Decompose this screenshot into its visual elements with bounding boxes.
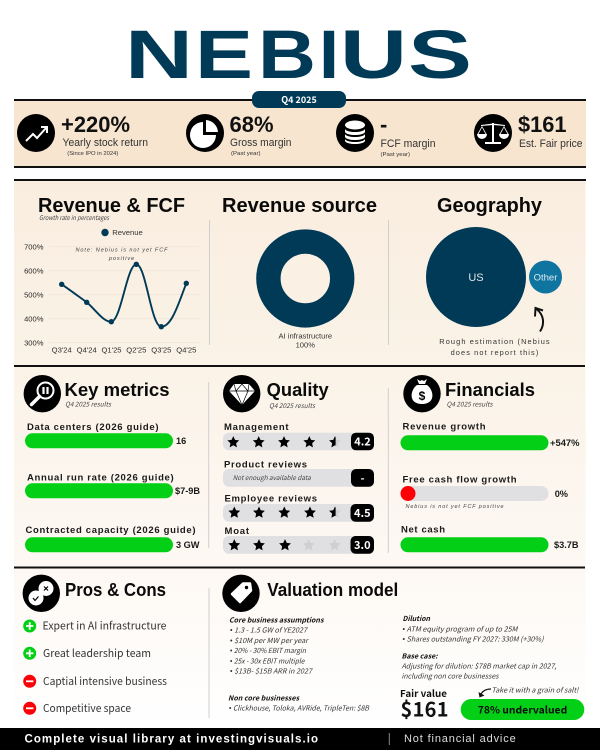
rating: employee reviews xyxy=(223,494,374,522)
icon: pie chart xyxy=(186,114,224,152)
line chart: revenue growth: 300% xyxy=(24,338,44,348)
stat: gross margin: Gross margin xyxy=(230,137,292,149)
fair value: Fair value xyxy=(400,686,447,700)
badge: Q4 2025: Q4 2025 xyxy=(281,93,317,106)
text: non core businesses xyxy=(228,693,370,714)
footer: Not financial advice xyxy=(404,733,516,745)
rating: management: 4.2 xyxy=(354,434,371,450)
rating: employee reviews: Employee reviews xyxy=(224,494,317,505)
stat: FCF margin xyxy=(380,112,436,158)
estimation note: Rough estimation (Nebius xyxy=(439,337,551,346)
text: dilution: • Shares outstanding FY 2027: 330M (+30%) xyxy=(402,635,544,645)
metric: free cash flow growth: Nebius is not yet FCF positive xyxy=(406,504,504,510)
line chart: revenue growth: 700% xyxy=(24,242,44,252)
panel: Valuation model xyxy=(222,575,584,723)
metric: data centers: 16 xyxy=(176,436,186,446)
icon: money bag: $ xyxy=(419,389,426,403)
metric: data centers xyxy=(25,422,186,448)
fair value: $161 xyxy=(400,694,448,723)
bubble: Other xyxy=(529,260,562,294)
stat: stock return: +220% xyxy=(61,112,130,137)
heading: Revenue & FCF xyxy=(38,195,185,217)
rating: management xyxy=(223,422,374,450)
rating: moat: Moat xyxy=(224,526,250,537)
panel: Revenue source xyxy=(222,195,377,350)
icon: pros and cons xyxy=(23,575,60,612)
text: core business assumptions: • 25x - 30x EBIT multiple xyxy=(230,656,306,666)
icon: balance scales xyxy=(474,114,512,152)
metric: contracted capacity: 3 GW xyxy=(176,540,200,550)
line chart: revenue growth: 500% xyxy=(24,290,44,300)
chart note xyxy=(75,248,169,262)
stat: stock return: (Since IPO in 2024) xyxy=(67,151,118,157)
rating: product reviews: Not enough available data xyxy=(233,472,311,482)
logo: Nebius wordmark: I xyxy=(319,16,339,93)
footer xyxy=(0,728,600,750)
line chart: revenue growth: Q4'25 xyxy=(176,346,196,354)
icon: stock trend xyxy=(17,114,55,152)
panel: Key metrics xyxy=(24,375,200,552)
pro item: Great leadership team xyxy=(43,646,151,661)
legend: Revenue xyxy=(112,228,143,237)
text: dilution: Dilution xyxy=(402,614,431,624)
bubble: US xyxy=(426,227,526,327)
metric: free cash flow growth: 0% xyxy=(555,489,568,499)
text: non core businesses: • Clickhouse, Toloka, AVRide, TripleTen: $8B xyxy=(229,704,370,714)
line chart: revenue growth: Q3'24 xyxy=(52,346,72,354)
donut label: 100% xyxy=(296,340,315,350)
con item: Captial intensive business xyxy=(43,674,167,689)
stat: gross margin xyxy=(230,112,292,157)
stat: FCF margin: - xyxy=(380,112,387,137)
metric: data centers: Data centers (2026 guide) xyxy=(27,422,158,433)
metric: contracted capacity: Contracted capacity (2026 guide) xyxy=(26,525,196,536)
rating: product reviews: Product reviews xyxy=(224,459,307,470)
text: core business assumptions: Core business assumptions xyxy=(229,615,325,625)
heading: Key metrics xyxy=(64,380,170,400)
donut label xyxy=(278,332,332,350)
logo: Nebius wordmark: B xyxy=(258,16,316,93)
stat: fair price xyxy=(518,112,582,150)
stat: FCF margin: (Past year) xyxy=(380,152,410,158)
panel background xyxy=(14,181,586,728)
rating: product reviews: - xyxy=(360,470,365,486)
text: base case: Adjusting for dilution: $78B market cap in 2027, xyxy=(402,662,557,672)
chart note: positive xyxy=(108,256,135,262)
rating: product reviews xyxy=(223,459,374,487)
text: core business assumptions: • 1.3 - 1.5 GW of YE2027 xyxy=(230,626,308,636)
line chart: revenue growth: Q3'25 xyxy=(151,346,171,354)
icon: price tag xyxy=(222,575,260,612)
panel: Financials xyxy=(400,375,580,552)
logo: Nebius wordmark: U xyxy=(340,16,407,93)
metric: free cash flow growth xyxy=(400,475,568,510)
bubble: US: US xyxy=(468,272,484,284)
donut label: AI infrastructure xyxy=(278,332,332,340)
logo: Nebius wordmark: S xyxy=(408,16,472,93)
subtitle: Q4 2025 results xyxy=(269,400,316,410)
line chart: revenue growth xyxy=(24,242,199,354)
icon: magnifier xyxy=(24,375,61,412)
heading: Revenue source xyxy=(222,195,377,217)
panel: Quality xyxy=(223,375,374,554)
heading: Pros & Cons xyxy=(65,580,166,600)
heading: Geography xyxy=(437,195,543,217)
chart note: Note: Nebius is not yet FCF xyxy=(75,248,169,254)
stat: fair price: Est. Fair price xyxy=(519,138,582,150)
metric: free cash flow growth: Free cash flow growth xyxy=(402,475,517,486)
text: base case: including non core businesses xyxy=(402,672,499,682)
heading: Quality xyxy=(267,380,329,400)
stat: stock return xyxy=(61,112,148,157)
subtitle: Growth rate in percentages xyxy=(39,212,110,222)
pro item: Expert in AI infrastructure xyxy=(42,618,167,634)
stat: fair price: $161 xyxy=(518,112,566,137)
con item: Competitive space xyxy=(43,701,131,716)
text: core business assumptions: • 20% - 30% EBIT margin xyxy=(230,646,307,656)
donut chart xyxy=(268,242,342,315)
text: dilution xyxy=(402,614,544,645)
rating: employee reviews: 4.5 xyxy=(354,505,371,521)
text: dilution: • ATM equity program of up to 25M xyxy=(402,624,519,634)
rating: moat: 3.0 xyxy=(354,537,371,553)
heading: Financials xyxy=(445,380,535,400)
logo: Nebius wordmark: E xyxy=(195,16,253,93)
text: base case: Base case: xyxy=(402,651,438,661)
icon: diamond xyxy=(223,375,260,412)
text: core business assumptions xyxy=(229,615,325,677)
logo: Nebius wordmark xyxy=(125,16,472,93)
logo: Nebius wordmark: N xyxy=(125,16,193,93)
metric: annual run rate: $7-9B xyxy=(175,486,200,496)
metric: revenue growth: +547% xyxy=(550,438,580,448)
stat: gross margin: 68% xyxy=(230,112,274,137)
footer: Complete visual library at investingvisuals.io xyxy=(24,734,318,746)
line chart: revenue growth: 400% xyxy=(24,314,44,324)
line chart: revenue growth: Q1'25 xyxy=(101,346,122,354)
rating: management: Management xyxy=(224,422,289,433)
badge: Q4 2025 xyxy=(252,91,346,108)
panel: headline KPIs xyxy=(14,91,586,168)
text: non core businesses: Non core businesses xyxy=(228,693,301,703)
metric: contracted capacity xyxy=(25,525,200,552)
line chart: revenue growth: Q4'24 xyxy=(77,346,97,354)
text: base case xyxy=(402,651,557,682)
icon: coins xyxy=(336,114,374,152)
badge: undervalued: 78% undervalued xyxy=(478,701,567,716)
text: core business assumptions: • $13B- $15B ARR in 2027 xyxy=(230,667,313,677)
badge: undervalued xyxy=(461,699,584,720)
stat: FCF margin: FCF margin xyxy=(380,138,436,150)
estimation note xyxy=(439,337,551,357)
subtitle: Q4 2025 results xyxy=(65,398,112,408)
stat: gross margin: (Past year) xyxy=(231,151,261,157)
heading: Valuation model xyxy=(267,580,398,600)
metric: annual run rate xyxy=(25,473,200,498)
text: core business assumptions: • $10M per MW per year xyxy=(230,636,309,646)
subtitle: Q4 2025 results xyxy=(446,398,493,408)
estimation note: does not report this) xyxy=(451,348,539,357)
panel: Revenue & FCF xyxy=(24,195,199,354)
metric: net cash: Net cash xyxy=(401,525,445,536)
callout: grain of salt: Take it with a grain of salt! xyxy=(492,686,579,696)
metric: revenue growth: Revenue growth xyxy=(402,422,486,433)
stat: stock return: Yearly stock return xyxy=(62,137,148,149)
line chart: revenue growth: 600% xyxy=(24,266,44,276)
bubble: Other: Other xyxy=(534,272,557,284)
rating: moat xyxy=(223,526,374,554)
metric: annual run rate: Annual run rate (2026 guide) xyxy=(27,473,174,484)
line chart: revenue growth: Q2'25 xyxy=(126,346,146,354)
arrow xyxy=(535,308,543,332)
panel: Pros & Cons xyxy=(23,575,167,716)
metric: revenue growth xyxy=(400,422,580,450)
panel: Geography xyxy=(426,195,562,357)
metric: net cash: $3.7B xyxy=(554,540,579,550)
metric: net cash xyxy=(400,525,579,552)
icon: money bag xyxy=(403,375,441,412)
